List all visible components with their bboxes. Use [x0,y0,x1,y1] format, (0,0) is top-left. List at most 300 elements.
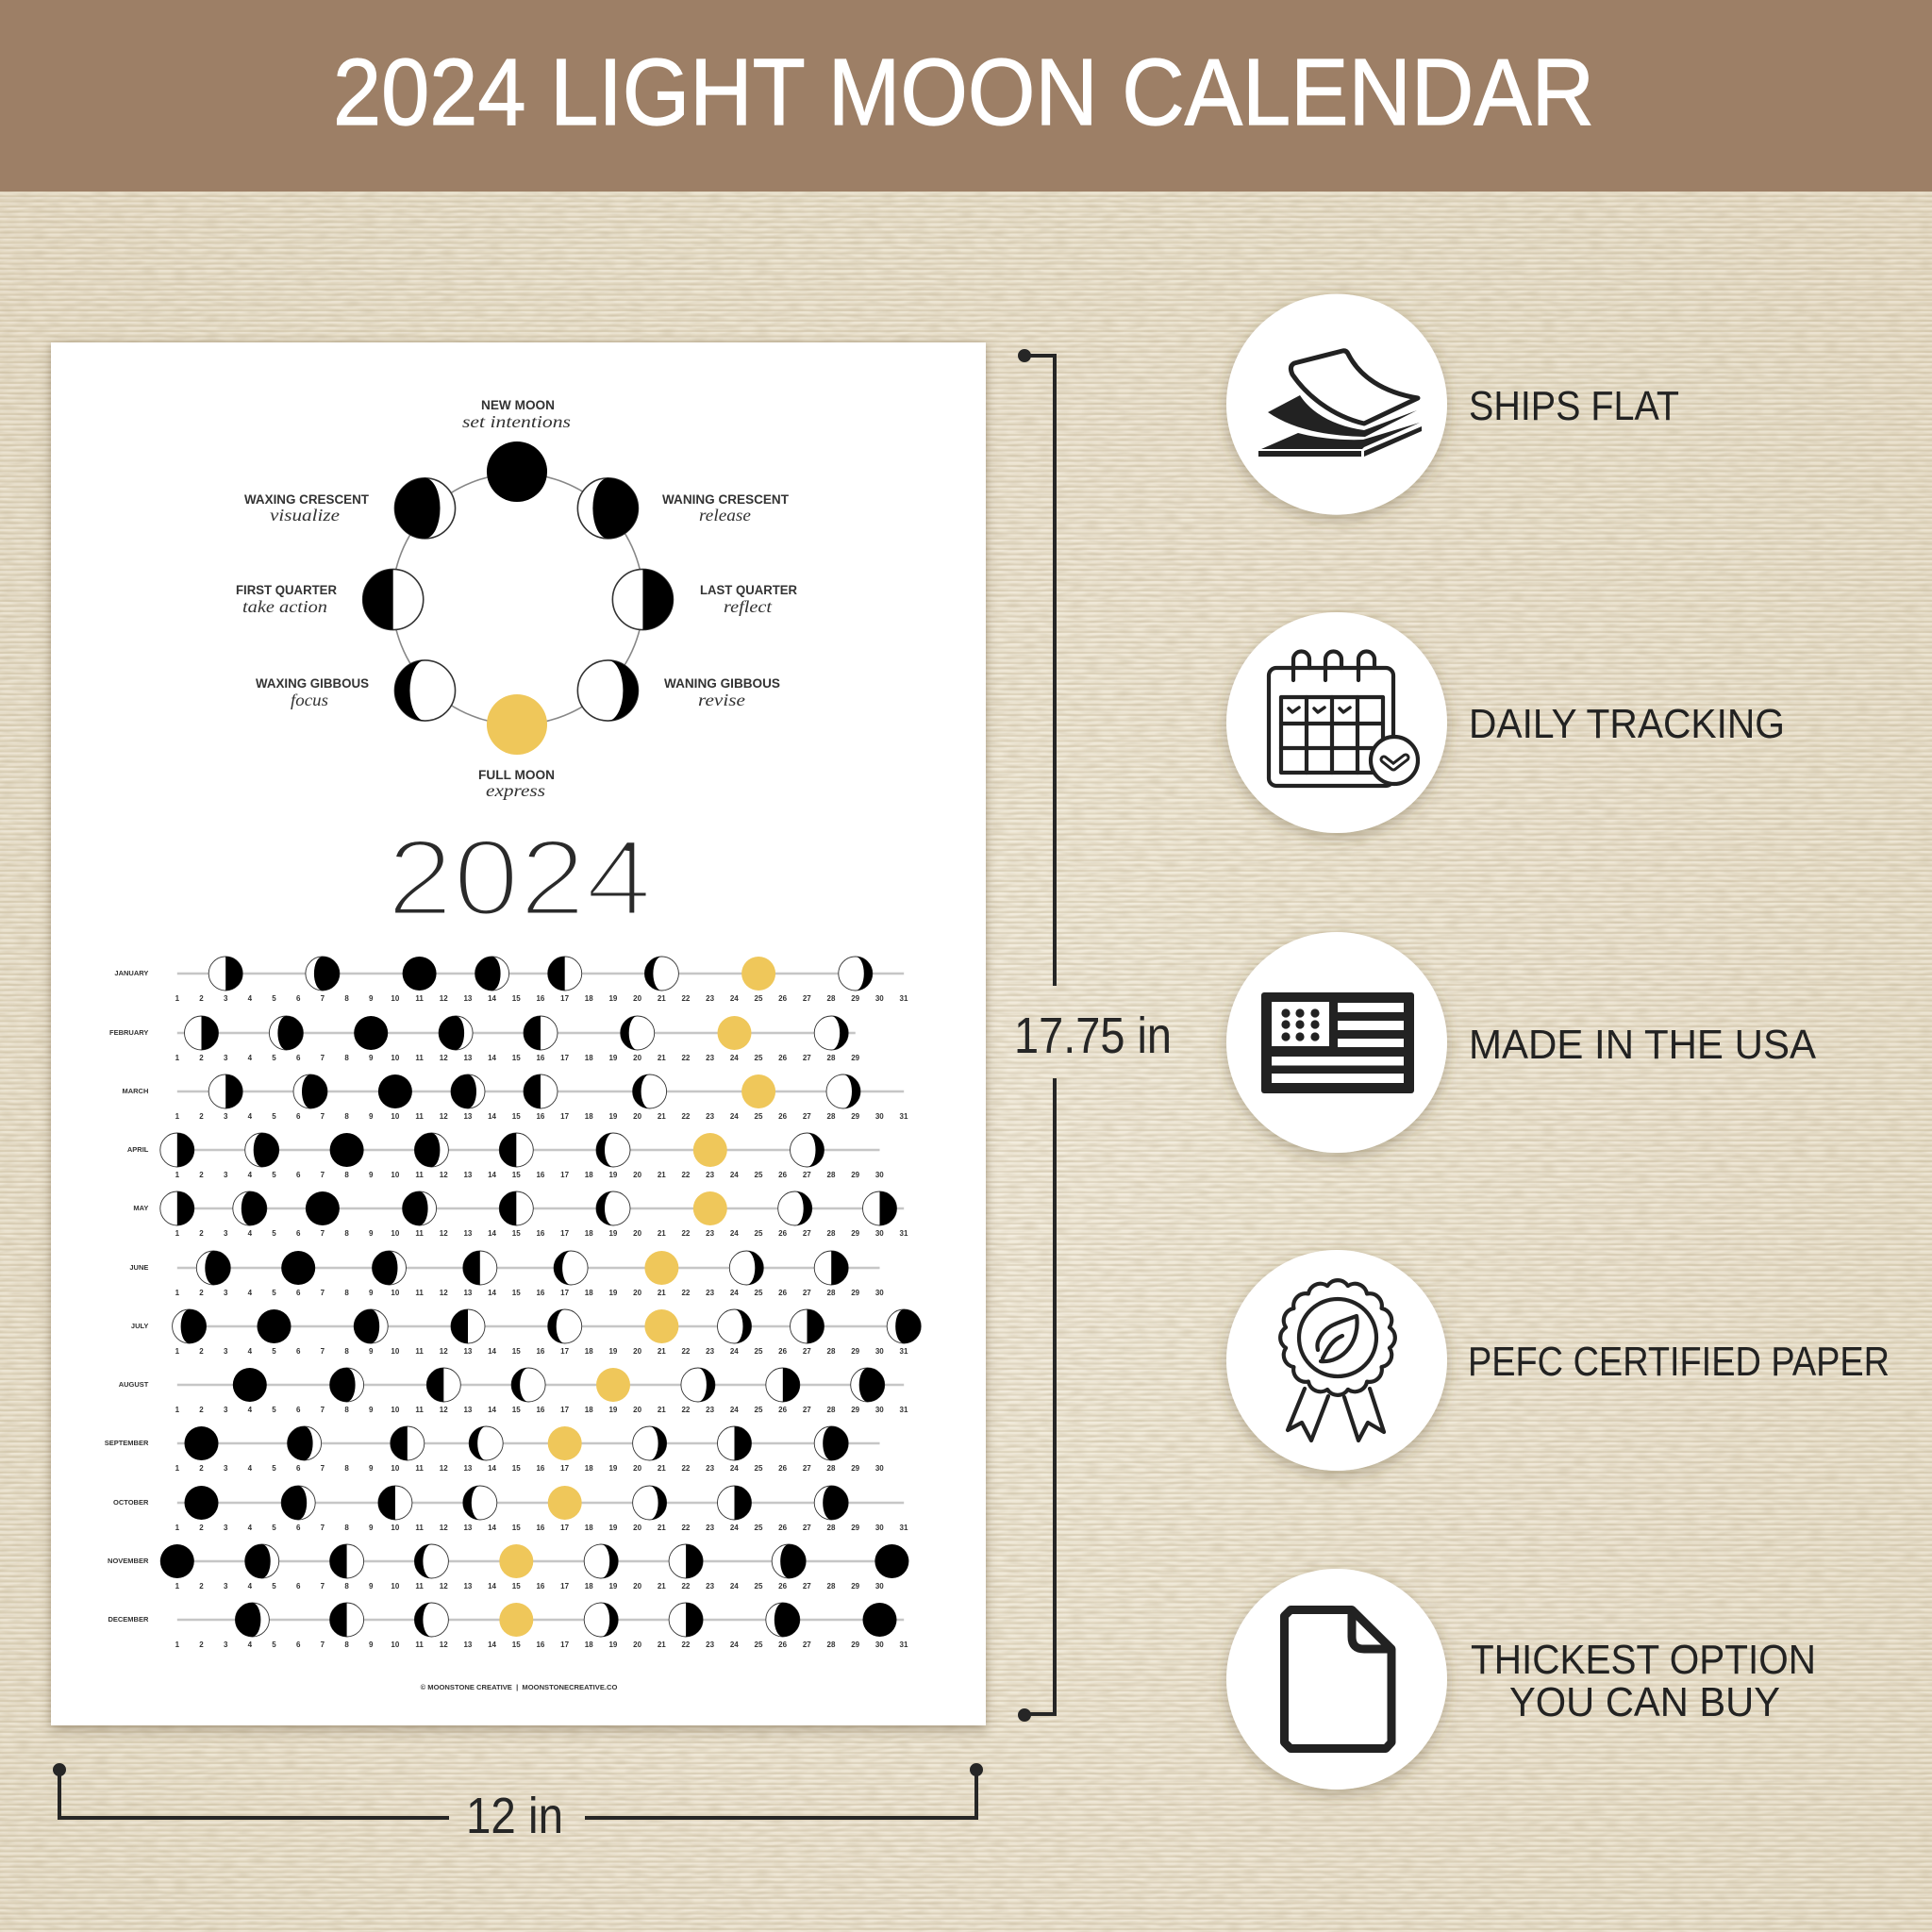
month: November: 22 [681,1582,690,1591]
month: August: 22 [681,1406,690,1414]
month: October: 14 [488,1523,496,1532]
wheel script captions: visualize [270,506,340,525]
month: June: 29 [851,1289,859,1296]
month: June: 4 [248,1289,252,1296]
month: January [114,957,908,1003]
month: April: 24 [730,1171,739,1179]
month: December: 14 [488,1641,496,1649]
month: January: 11 [415,994,424,1003]
month: October: 19 [608,1523,617,1532]
month: April: 5 [272,1171,276,1179]
month: December: 30 [875,1641,884,1649]
month: February: FEBRUARY [109,1028,148,1037]
month: April: 10 [391,1171,399,1179]
month: January: 13 [463,994,472,1003]
month: August: 15 [512,1406,521,1414]
month: December: 27 [803,1641,811,1649]
month: February: 22 [681,1054,690,1062]
month: June: 14 [488,1289,496,1296]
month: March: 4 [248,1112,252,1121]
month: March: 27 [803,1112,811,1121]
month: October: 11 [415,1523,424,1532]
month: June [129,1251,884,1296]
month: September: 11 [415,1464,424,1473]
month: April: 25 [755,1171,762,1179]
month: February: 18 [585,1054,593,1062]
wheel phase labels: WAXING CRESCENT [244,492,370,507]
month: May: 5 [272,1229,276,1238]
month: July: 6 [296,1347,300,1356]
month: April: 26 [778,1171,787,1179]
month: April: 2 [199,1171,204,1179]
month: July [131,1309,922,1356]
month: December: 25 [755,1641,762,1649]
month: November: NOVEMBER [108,1557,148,1565]
month: September: 22 [681,1464,690,1473]
month: November: 18 [585,1582,593,1591]
month: October: 28 [827,1523,835,1532]
month: January: 20 [633,994,641,1003]
month: February: 25 [755,1054,762,1062]
month: March: 2 [199,1112,204,1121]
month: July: 28 [827,1347,835,1356]
month: June: 11 [415,1289,424,1296]
month: December: 8 [344,1641,349,1649]
month: February: 20 [633,1054,641,1062]
height label: 17.75 in [1014,1008,1172,1064]
month: June: 21 [658,1289,666,1296]
month: April: 27 [803,1171,811,1179]
month: April: 12 [440,1171,448,1179]
month: October: 12 [440,1523,448,1532]
month: January: 8 [344,994,349,1003]
month: January: 19 [608,994,617,1003]
month: January: 31 [900,994,908,1003]
month: July: 19 [608,1347,617,1356]
month: October: 6 [296,1523,300,1532]
month: March: 22 [681,1112,690,1121]
month: May: 9 [369,1229,373,1238]
month: May [133,1191,908,1238]
month: December: 11 [415,1641,424,1649]
month: January: 15 [512,994,521,1003]
month: July: 20 [633,1347,641,1356]
month: November: 15 [512,1582,521,1591]
month: May: 30 [875,1229,884,1238]
month: October: 13 [463,1523,472,1532]
month: September: 9 [369,1464,373,1473]
month: January: 9 [369,994,373,1003]
month: January: 29 [851,994,859,1003]
month: September: 20 [633,1464,641,1473]
label: thickest option you can buy: YOU CAN BUY [1509,1679,1780,1725]
month: December: 1 [175,1641,179,1649]
month: June: JUNE [129,1262,148,1272]
month: August: 11 [415,1406,424,1414]
month: December: 5 [272,1641,276,1649]
month: March: 29 [851,1112,859,1121]
month: November [108,1543,909,1591]
month: January: 24 [730,994,739,1003]
month: February: 23 [706,1054,714,1062]
label: ships flat: SHIPS FLAT [1469,383,1679,429]
month: November: 9 [369,1582,373,1591]
month: June: 18 [585,1289,593,1296]
month: December: 21 [658,1641,666,1649]
month: August: 2 [199,1406,204,1414]
month: January: 4 [248,994,252,1003]
month: October: 24 [730,1523,739,1532]
month: March: 18 [585,1112,593,1121]
wheel script captions: focus [291,691,328,709]
feature: made in the usa [1226,932,1817,1153]
month: March [122,1074,908,1121]
month: April: 16 [536,1171,544,1179]
month: February: 27 [803,1054,811,1062]
month: February: 6 [296,1054,300,1062]
month: January: 17 [560,994,569,1003]
month: April: 4 [248,1171,252,1179]
month: November: 16 [536,1582,544,1591]
month: December: 19 [608,1641,617,1649]
month: April: 11 [415,1171,424,1179]
month: July: 10 [391,1347,399,1356]
month: March: 24 [730,1112,739,1121]
wheel ring [392,474,643,724]
month: August: 18 [585,1406,593,1414]
month: June: 26 [778,1289,787,1296]
month: February: 29 [851,1054,859,1062]
month: February: 10 [391,1054,399,1062]
month: January: 6 [296,994,300,1003]
month: November: 11 [415,1582,424,1591]
month: March: 19 [608,1112,617,1121]
month: May: 12 [440,1229,448,1238]
wheel script captions: revise [698,691,745,709]
month: September: 24 [730,1464,739,1473]
month: February: 11 [415,1054,424,1062]
month: May: 20 [633,1229,641,1238]
month: September: 5 [272,1464,276,1473]
month: May: 8 [344,1229,349,1238]
month: March: 16 [536,1112,544,1121]
month: November: 20 [633,1582,641,1591]
month: October: 18 [585,1523,593,1532]
width label: 12 in [466,1788,563,1844]
month: October: 2 [199,1523,204,1532]
month: October: 23 [706,1523,714,1532]
month: September: 13 [463,1464,472,1473]
month: October: 26 [778,1523,787,1532]
month: January: 5 [272,994,276,1003]
month: October: 7 [321,1523,325,1532]
month: September: 16 [536,1464,544,1473]
month: May: 14 [488,1229,496,1238]
month: March: 20 [633,1112,641,1121]
month: October: 3 [224,1523,227,1532]
month: July: 9 [369,1347,373,1356]
wheel phase labels: FIRST QUARTER [236,583,337,597]
month: October: 22 [681,1523,690,1532]
month: May: 16 [536,1229,544,1238]
month: March: 6 [296,1112,300,1121]
month: July: 22 [681,1347,690,1356]
month: July: 21 [658,1347,666,1356]
month: August: 5 [272,1406,276,1414]
month: July: 15 [512,1347,521,1356]
poster footer credit: © MOONSTONE CREATIVE | MOONSTONECREATIVE.CO [421,1683,617,1691]
month: September: 15 [512,1464,521,1473]
month: May: 27 [803,1229,811,1238]
month: June: 13 [463,1289,472,1296]
month: October: 4 [248,1523,252,1532]
month: January: 14 [488,994,496,1003]
month: September: 27 [803,1464,811,1473]
month: December: 23 [706,1641,714,1649]
month: December: 29 [851,1641,859,1649]
panel: poster [51,342,986,1725]
wheel phase labels: NEW MOON [481,398,555,412]
wheel phase labels: LAST QUARTER [700,583,797,597]
month: December: 13 [463,1641,472,1649]
title banner [0,0,1932,192]
month: December: 6 [296,1641,300,1649]
month: June: 16 [536,1289,544,1296]
month: May: 19 [608,1229,617,1238]
month: October: OCTOBER [113,1498,148,1506]
wheel phase labels: FULL MOON [478,768,555,782]
month: December: 18 [585,1641,593,1649]
month: March: 30 [875,1112,884,1121]
month: July: 2 [199,1347,204,1356]
month: March: 28 [827,1112,835,1121]
month: May: 3 [224,1229,227,1238]
month: April: 22 [681,1171,690,1179]
month: March: 10 [391,1112,399,1121]
month: August: 1 [175,1406,179,1414]
month: September: 6 [296,1464,300,1473]
month: August: 12 [440,1406,448,1414]
month: July: 23 [706,1347,714,1356]
month: September: 7 [321,1464,325,1473]
month: January: 23 [706,994,714,1003]
month: May: 21 [658,1229,666,1238]
month: May: 6 [296,1229,300,1238]
month: December: 17 [560,1641,569,1649]
month: April: 28 [827,1171,835,1179]
month: December: 22 [681,1641,690,1649]
month: August: 31 [900,1406,908,1414]
month: June: 20 [633,1289,641,1296]
month: December: DECEMBER [108,1615,148,1624]
month: August: 14 [488,1406,496,1414]
month: May: 26 [778,1229,787,1238]
month: October [113,1485,908,1532]
month: March: 14 [488,1112,496,1121]
month: May: 11 [415,1229,424,1238]
month: November: 19 [608,1582,617,1591]
month: July: 18 [585,1347,593,1356]
month: May: 29 [851,1229,859,1238]
month: August: 10 [391,1406,399,1414]
month: November: 12 [440,1582,448,1591]
wheel script captions: take action [242,597,327,616]
month: December: 4 [248,1641,252,1649]
month: October: 21 [658,1523,666,1532]
month: September: 18 [585,1464,593,1473]
month: March: MARCH [122,1087,148,1095]
month: July: 8 [344,1347,349,1356]
month: August: 28 [827,1406,835,1414]
month: October: 8 [344,1523,349,1532]
month: March: 31 [900,1112,908,1121]
month: June: 25 [755,1289,762,1296]
month: February: 19 [608,1054,617,1062]
month: April: 17 [560,1171,569,1179]
month: January: 25 [755,994,762,1003]
month: December: 28 [827,1641,835,1649]
icon: american flag [1261,992,1414,1093]
month: May: 31 [900,1229,908,1238]
month: April: 21 [658,1171,666,1179]
month: July: 5 [272,1347,276,1356]
month: April: 19 [608,1171,617,1179]
month: November: 3 [224,1582,227,1591]
month: May: 23 [706,1229,714,1238]
month: December: 31 [900,1641,908,1649]
month: August: 29 [851,1406,859,1414]
month: April: 23 [706,1171,714,1179]
moon phase wheel and year [236,398,797,939]
month: August [119,1368,908,1414]
month: July: 24 [730,1347,739,1356]
month: October: 17 [560,1523,569,1532]
month: June: 19 [608,1289,617,1296]
month: January: 16 [536,994,544,1003]
month: March: 17 [560,1112,569,1121]
wheel phase labels: WAXING GIBBOUS [256,676,369,691]
month: December: 24 [730,1641,739,1649]
month: September: 1 [175,1464,179,1473]
month: October: 10 [391,1523,399,1532]
month: January: 2 [199,994,204,1003]
month: March: 9 [369,1112,373,1121]
month: December: 10 [391,1641,399,1649]
month: December: 26 [778,1641,787,1649]
month: March: 21 [658,1112,666,1121]
month: December [108,1602,908,1649]
month: August: 30 [875,1406,884,1414]
label: thickest option you can buy [1471,1637,1816,1725]
month: December: 9 [369,1641,373,1649]
month: June: 10 [391,1289,399,1296]
month: November: 2 [199,1582,204,1591]
month: February: 7 [321,1054,325,1062]
month: March: 15 [512,1112,521,1121]
month: March: 1 [175,1112,179,1121]
month: August: 23 [706,1406,714,1414]
month: June: 24 [730,1289,739,1296]
month: March: 23 [706,1112,714,1121]
month: June: 30 [875,1289,884,1296]
month: August: 16 [536,1406,544,1414]
year heading: 2024 [387,818,652,939]
month: August: 27 [803,1406,811,1414]
month: September: 26 [778,1464,787,1473]
month: September: 8 [344,1464,349,1473]
month: May: MAY [133,1204,148,1212]
month: May: 4 [248,1229,252,1238]
month: November: 23 [706,1582,714,1591]
month: November: 29 [851,1582,859,1591]
month: June: 6 [296,1289,300,1296]
month: January: JANUARY [114,969,148,977]
month: September: SEPTEMBER [105,1439,148,1447]
month: August: 26 [778,1406,787,1414]
month: September: 28 [827,1464,835,1473]
month: August: 8 [344,1406,349,1414]
month: July: 25 [755,1347,762,1356]
month: January: 18 [585,994,593,1003]
month: November: 14 [488,1582,496,1591]
month: August: 19 [608,1406,617,1414]
month: January: 22 [681,994,690,1003]
month: November: 6 [296,1582,300,1591]
month: July: 11 [415,1347,424,1356]
month: March: 25 [755,1112,762,1121]
month: November: 17 [560,1582,569,1591]
month: September: 12 [440,1464,448,1473]
month: August: 13 [463,1406,472,1414]
icon: calendar with check [1269,652,1418,786]
month: October: 20 [633,1523,641,1532]
month: February: 3 [224,1054,227,1062]
label: made in the usa: MADE IN THE USA [1469,1022,1817,1068]
wheel script captions [242,412,773,800]
month: July: 12 [440,1347,448,1356]
month: September: 14 [488,1464,496,1473]
month: August: 4 [248,1406,252,1414]
month: June: 28 [827,1289,835,1296]
month: January: 28 [827,994,835,1003]
month: July: 29 [851,1347,859,1356]
wheel script captions: set intentions [462,412,571,431]
month: June: 27 [803,1289,811,1296]
month: July: 4 [248,1347,252,1356]
month: October: 29 [851,1523,859,1532]
month: May: 17 [560,1229,569,1238]
wheel phase labels [236,398,797,782]
month: April: APRIL [127,1145,148,1154]
month: May: 10 [391,1229,399,1238]
month: April: 14 [488,1171,496,1179]
month: October: 31 [900,1523,908,1532]
month: June: 9 [369,1289,373,1296]
month: April: 3 [224,1171,227,1179]
month: April: 6 [296,1171,300,1179]
month: March: 8 [344,1112,349,1121]
month: July: 27 [803,1347,811,1356]
month: November: 27 [803,1582,811,1591]
month: November: 4 [248,1582,252,1591]
label: daily tracking: DAILY TRACKING [1469,701,1785,747]
month: September: 17 [560,1464,569,1473]
month: June: 17 [560,1289,569,1296]
month: August: AUGUST [119,1380,148,1389]
month: September [105,1426,884,1473]
month: September: 3 [224,1464,227,1473]
month: January: 21 [658,994,666,1003]
